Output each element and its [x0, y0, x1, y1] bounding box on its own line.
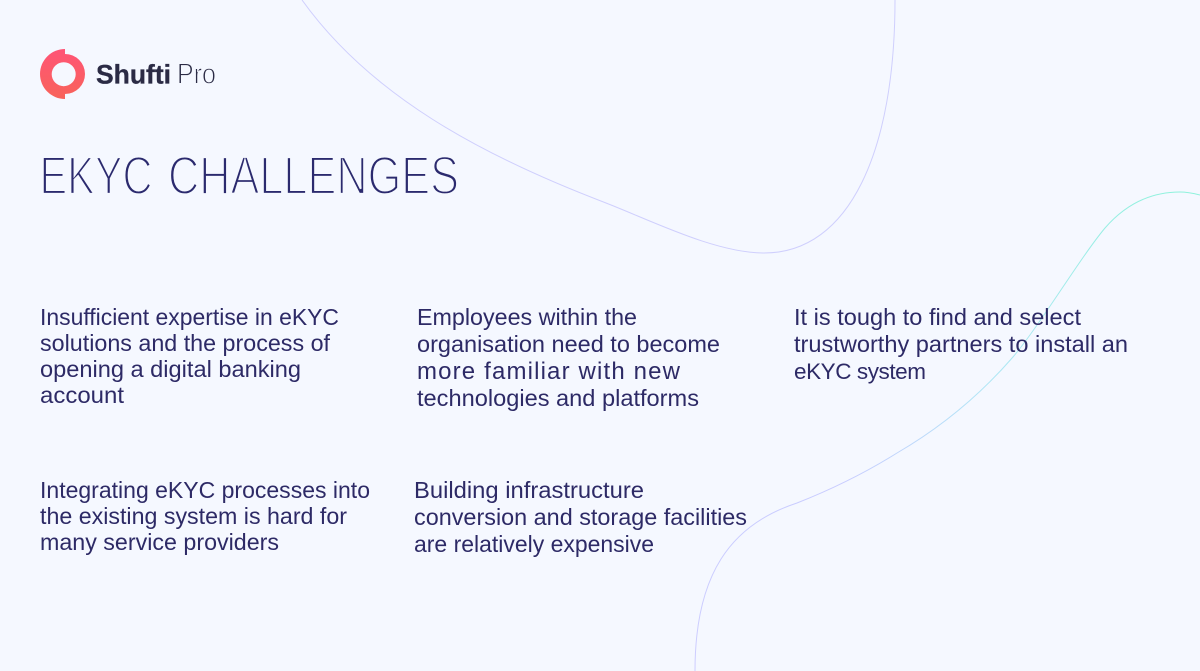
- text block: infrastructure cost: [414, 477, 747, 557]
- text block: employees familiarity: Employees within the: [417, 304, 637, 330]
- logo wordmark: Pro: [177, 58, 216, 90]
- text block: trustworthy partners: [794, 304, 1128, 384]
- text block: insufficient expertise: solutions and the process of: [40, 330, 330, 356]
- text block: insufficient expertise: opening a digital banking: [40, 356, 301, 382]
- logo wordmark: [96, 58, 216, 90]
- text block: integrating processes: [40, 477, 370, 555]
- text block: infrastructure cost: are relatively expensive: [414, 531, 654, 557]
- text block: employees familiarity: technologies and platforms: [417, 385, 699, 411]
- text block: trustworthy partners: eKYC system: [794, 359, 926, 384]
- title: CHALLENGES: [168, 146, 459, 206]
- text block: integrating processes: Integrating eKYC processes into: [40, 477, 370, 503]
- text block: employees familiarity: more familiar with new: [417, 358, 681, 385]
- text block: insufficient expertise: [40, 304, 339, 408]
- text block: integrating processes: many service providers: [40, 529, 279, 555]
- decorative curve: right wave: [695, 192, 1200, 671]
- text block: insufficient expertise: account: [40, 382, 124, 408]
- text block: integrating processes: the existing system is hard for: [40, 503, 347, 529]
- text block: infrastructure cost: Building infrastructure: [414, 477, 644, 503]
- text block: infrastructure cost: conversion and storage facilities: [414, 504, 747, 530]
- logo: Shufti Pro: [40, 49, 216, 99]
- decorative curve: top: [302, 0, 895, 253]
- logo wordmark: Shufti: [96, 60, 171, 90]
- title: [40, 146, 459, 206]
- text block: employees familiarity: [417, 304, 720, 411]
- icon: logo ring: [40, 49, 85, 99]
- text block: insufficient expertise: Insufficient expertise in eKYC: [40, 304, 339, 330]
- title: EKYC: [40, 146, 152, 206]
- text block: trustworthy partners: trustworthy partners to install an: [794, 331, 1128, 357]
- text block: trustworthy partners: It is tough to find and select: [794, 304, 1081, 330]
- text block: employees familiarity: organisation need to become: [417, 331, 720, 357]
